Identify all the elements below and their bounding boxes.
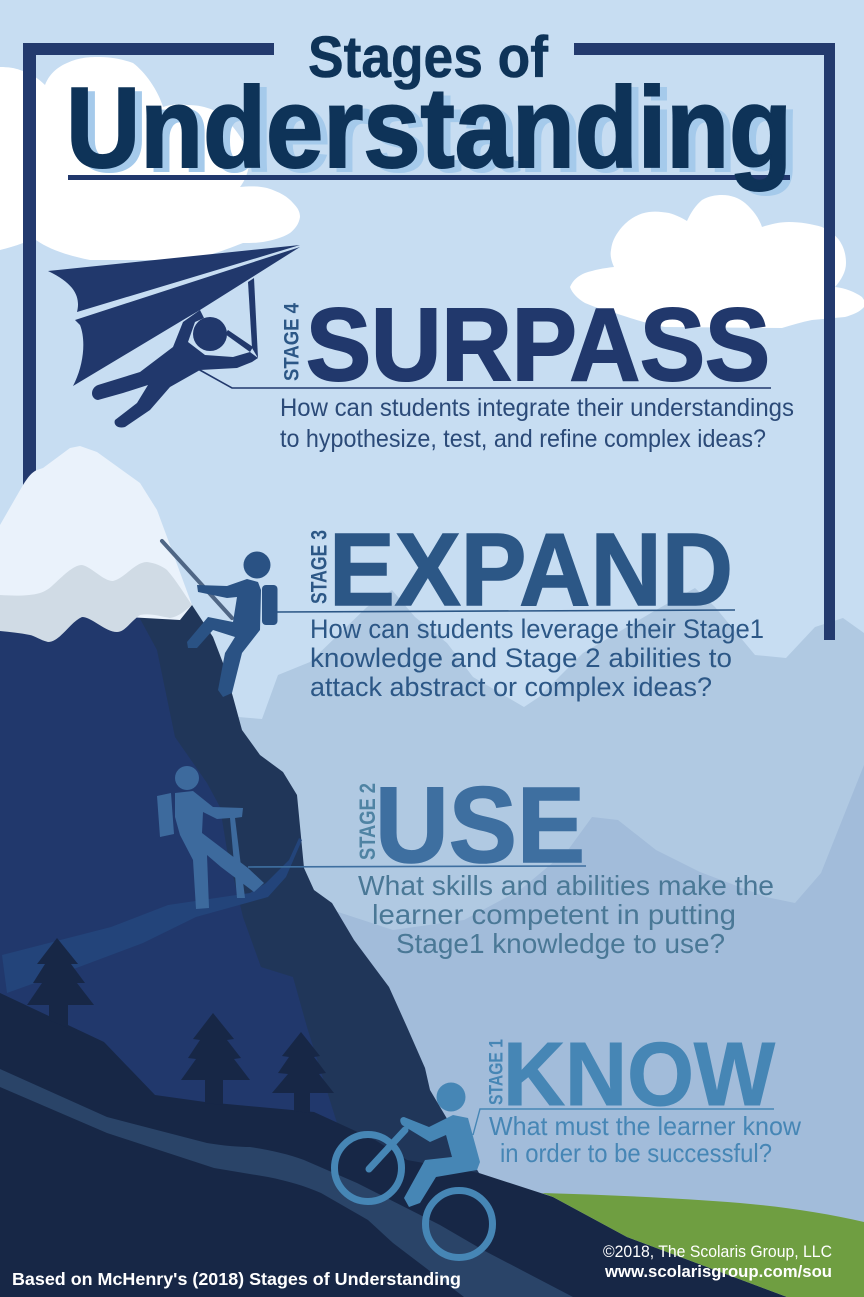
rule	[248, 866, 586, 867]
vertical label stage 3: STAGE 3	[306, 530, 332, 604]
heading: expand: EXPAND	[329, 512, 733, 627]
body text: in order to be successful?	[500, 1138, 772, 1168]
body text	[489, 1111, 801, 1168]
tree 2	[181, 1013, 250, 1105]
tree 1	[27, 938, 94, 1028]
body text: What skills and abilities make the	[358, 870, 774, 901]
body text: What must the learner know	[489, 1111, 801, 1141]
green grass	[542, 1193, 864, 1297]
decorative frame	[23, 43, 835, 640]
icon: hiker	[157, 766, 264, 909]
heading: Stages of: Stages of	[308, 25, 549, 90]
heading: know: KNOW	[503, 1025, 775, 1125]
stage 1: know	[473, 1025, 801, 1168]
river on mountain	[2, 838, 302, 993]
icon: mountain biker	[334, 1082, 492, 1258]
foreground hill	[0, 993, 787, 1297]
snow cap	[0, 446, 192, 642]
tree 3	[272, 1032, 334, 1113]
cloud: right	[570, 195, 864, 328]
credit: copyright and url	[603, 1242, 832, 1281]
stage 3: expand	[276, 512, 764, 702]
distant mountains	[238, 588, 864, 1297]
heading: use: USE	[375, 764, 585, 885]
body text: How can students leverage their Stage1	[310, 614, 764, 644]
body text: learner competent in putting	[372, 899, 736, 930]
cloud: left	[0, 57, 300, 260]
icon: hang glider	[48, 245, 300, 428]
credit: source: Based on McHenry's (2018) Stages of Understanding	[12, 1269, 461, 1289]
rule	[198, 369, 771, 388]
body text: attack abstract or complex ideas?	[310, 672, 712, 702]
heading shadow: Understanding: Understanding	[73, 69, 799, 196]
body text	[310, 614, 764, 702]
credit: copyright and url: www.scolarisgroup.com/sou	[604, 1262, 832, 1281]
vertical label stage 4: STAGE 4	[280, 303, 304, 381]
heading: surpass: SURPASS	[306, 287, 770, 402]
credit: copyright and url: ©2018, The Scolaris Group, LLC	[603, 1242, 832, 1261]
body text: to hypothesize, test, and refine complex ideas?	[280, 425, 766, 453]
stage 2: use	[248, 764, 774, 959]
vertical label stage 1: STAGE 1	[486, 1039, 508, 1105]
body text: knowledge and Stage 2 abilities to	[310, 643, 732, 673]
title underline	[68, 175, 790, 180]
title	[66, 25, 799, 196]
body text: How can students integrate their understandings	[280, 394, 794, 422]
body text: Stage1 knowledge to use?	[396, 928, 725, 959]
icon: climber	[162, 541, 278, 697]
rule	[473, 1109, 774, 1135]
body text	[358, 870, 774, 959]
body text	[280, 394, 794, 453]
stage 4: surpass	[198, 287, 794, 453]
rule	[276, 610, 735, 612]
mountain: main face	[0, 600, 479, 1297]
heading: Understanding: Understanding	[66, 65, 792, 192]
vertical label stage 2: STAGE 2	[355, 783, 380, 860]
